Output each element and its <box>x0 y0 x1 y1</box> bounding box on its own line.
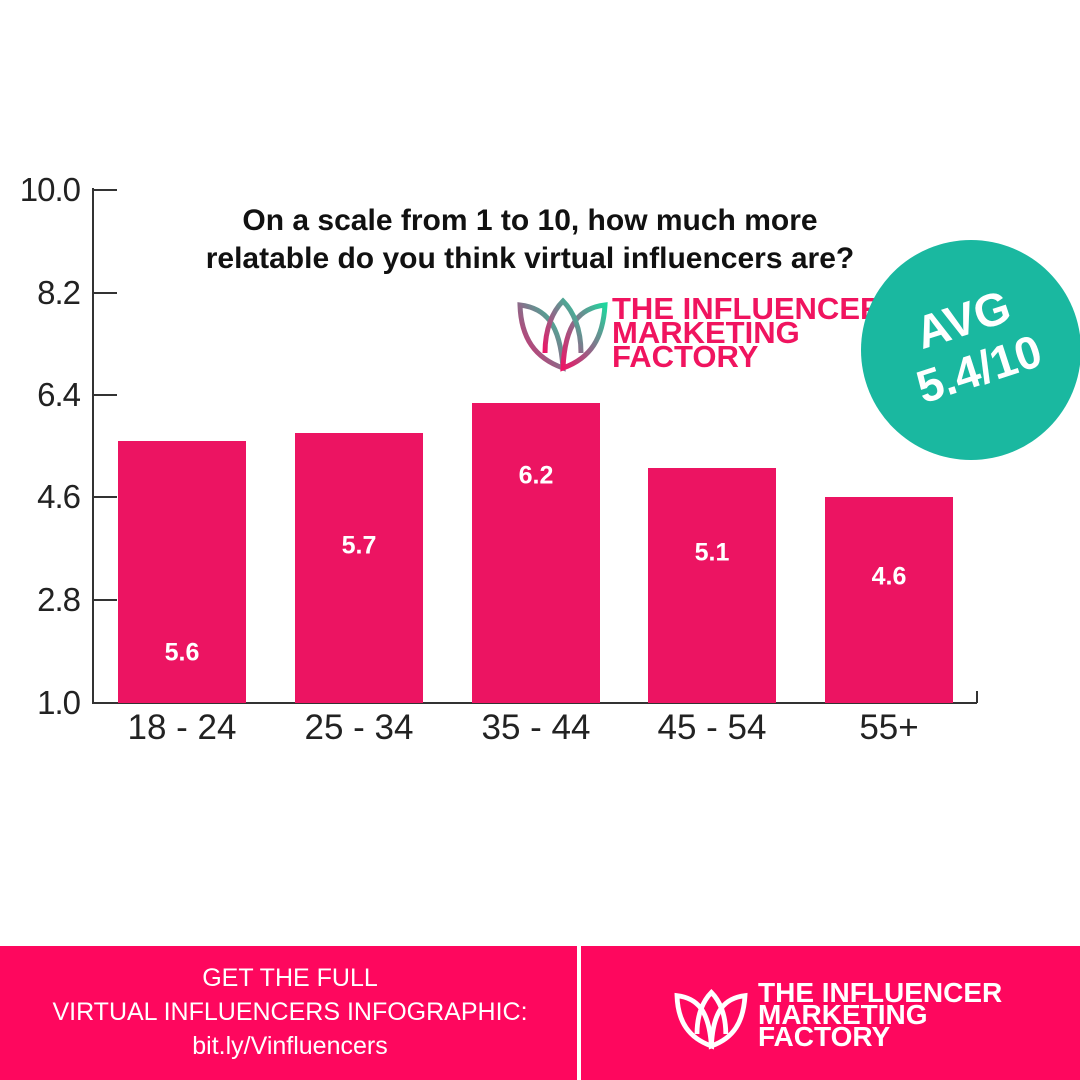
bar chart: 5.7 <box>342 532 376 560</box>
y axis: 6.4 <box>37 376 80 413</box>
title: On a scale from 1 to 10, how much more <box>242 204 818 237</box>
footer text: GET THE FULL <box>202 964 378 992</box>
logo: footer: MARKETING <box>758 999 928 1030</box>
y axis: 2.8 <box>37 581 80 618</box>
footer text: bit.ly/Vinfluencers <box>192 1032 388 1060</box>
bar chart: 35 - 44 <box>482 708 590 747</box>
footer text <box>52 964 528 1060</box>
y axis: 8.2 <box>37 274 80 311</box>
bar chart: 18 - 24 <box>128 708 236 747</box>
bar chart <box>118 403 953 747</box>
bar chart: 25 - 34 <box>305 708 413 747</box>
bar chart: 4.6 <box>872 562 906 590</box>
logo: top: THE INFLUENCER <box>612 291 882 326</box>
logo: top: FACTORY <box>612 339 758 374</box>
bar chart: 5.1 <box>695 538 729 566</box>
bar chart: 6.2 <box>519 462 553 490</box>
footer text: VIRTUAL INFLUENCERS INFOGRAPHIC: <box>52 998 528 1026</box>
logo: footer: THE INFLUENCER <box>758 977 1002 1008</box>
logo: top: MARKETING <box>612 315 800 350</box>
bar chart: 55+ <box>859 708 919 747</box>
footer banner <box>0 946 1080 1080</box>
y axis: 4.6 <box>37 478 80 515</box>
callout: average circle <box>861 240 1080 460</box>
logo: footer <box>674 977 1002 1052</box>
y axis <box>20 171 978 721</box>
bar chart: 45 - 54 <box>658 708 766 747</box>
callout: average circle: AVG <box>909 280 1017 359</box>
title <box>206 204 854 275</box>
callout: average circle: 5.4/10 <box>910 324 1048 413</box>
y axis: 1.0 <box>37 684 80 721</box>
y axis: 10.0 <box>20 171 80 208</box>
logo: footer: FACTORY <box>758 1021 890 1052</box>
logo: top <box>517 291 882 374</box>
title: relatable do you think virtual influencers are? <box>206 242 854 275</box>
bar chart: 5.6 <box>165 638 199 666</box>
